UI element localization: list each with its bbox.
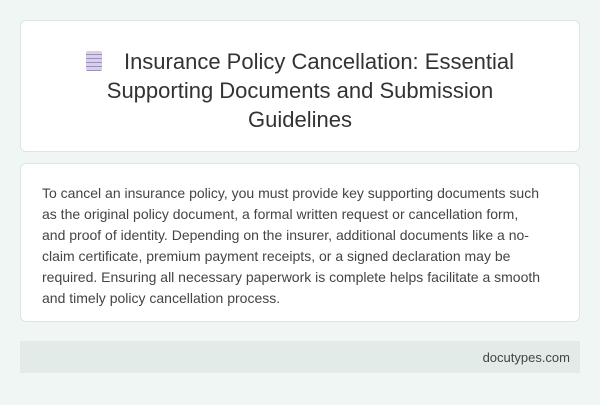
title: Insurance Policy Cancellation: Essential Supporting Documents and Submission Guidelines	[107, 49, 514, 132]
icon: document	[86, 51, 102, 71]
panel: header	[20, 20, 580, 152]
panel: body text	[20, 163, 580, 322]
text block: To cancel an insurance policy, you must provide key supporting documents such as the original policy document, a formal written request or cancellation form, and proof of identity. Depending on the insurer, additional documents like a no-claim certificate, premium payment receipts, or a signed declaration may be required. Ensuring all necessary paperwork is complete helps facilitate a smooth and timely policy cancellation process.	[42, 185, 540, 306]
footer	[20, 341, 580, 373]
footer text: docutypes.com	[483, 350, 570, 365]
